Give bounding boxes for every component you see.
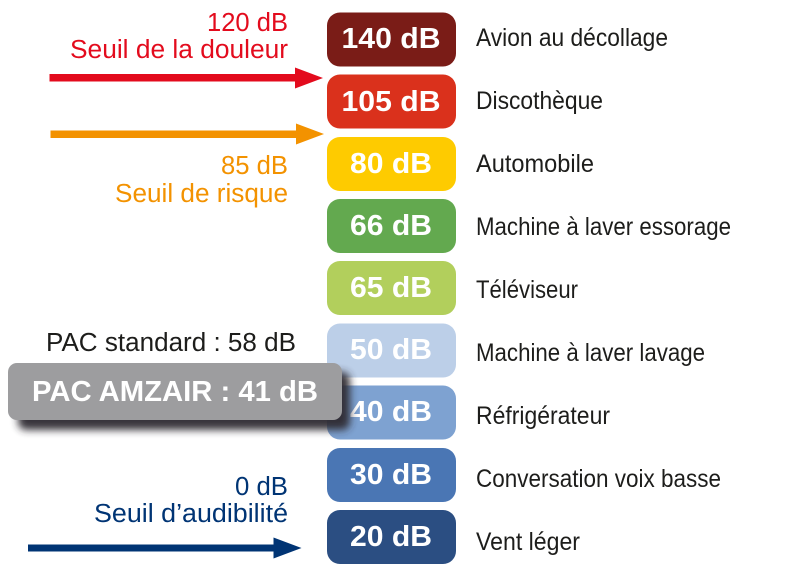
sound source labels — [476, 24, 731, 556]
sound source labels: Machine à laver essorage — [476, 213, 731, 241]
level: 66 dB: 66 dB — [350, 210, 432, 242]
sound source labels: Téléviseur — [476, 276, 578, 304]
level: 30 dB: 30 dB — [350, 459, 432, 491]
sound source labels: Vent léger — [476, 528, 580, 556]
level: 30 dB — [327, 448, 456, 502]
sound source labels: Automobile — [476, 150, 594, 178]
hearing threshold label: 0 dB — [235, 473, 288, 501]
level: 66 dB — [327, 199, 456, 253]
level: 105 dB: 105 dB — [342, 86, 440, 118]
arrow: risk threshold — [50, 124, 324, 144]
arrow: pain threshold — [50, 68, 323, 88]
level: 20 dB: 20 dB — [350, 521, 432, 553]
hearing threshold label — [94, 473, 288, 528]
level: 20 dB — [327, 510, 456, 564]
sound source labels: Discothèque — [476, 87, 603, 115]
standard heat pump label: PAC standard : 58 dB — [46, 329, 296, 357]
level: 40 dB — [327, 386, 456, 440]
risk threshold label: 85 dB — [221, 152, 288, 180]
level: 50 dB — [327, 324, 456, 378]
level: 50 dB: 50 dB — [350, 334, 432, 366]
sound source labels: Avion au décollage — [476, 24, 668, 52]
pain threshold label — [70, 9, 289, 64]
level: 140 dB: 140 dB — [342, 23, 440, 55]
level: 105 dB — [327, 74, 456, 128]
level: 65 dB: 65 dB — [350, 272, 432, 304]
pain threshold label: 120 dB — [207, 9, 288, 37]
decibel scale — [327, 12, 456, 564]
risk threshold label — [115, 152, 288, 208]
sound source labels: Réfrigérateur — [476, 402, 610, 430]
level: 65 dB — [327, 261, 456, 315]
level: 40 dB: 40 dB — [350, 396, 432, 428]
level: 80 dB — [327, 137, 456, 191]
level: 140 dB — [327, 12, 456, 66]
hearing threshold label: Seuil d’audibilité — [94, 500, 288, 528]
pain threshold label: Seuil de la douleur — [70, 36, 289, 64]
arrow: hearing threshold — [28, 538, 302, 558]
sound source labels: Conversation voix basse — [476, 465, 721, 493]
sound source labels: Machine à laver lavage — [476, 339, 705, 367]
risk threshold label: Seuil de risque — [115, 180, 288, 208]
level: 80 dB: 80 dB — [350, 148, 432, 180]
AMZAIR callout: PAC AMZAIR : 41 dB — [32, 376, 318, 408]
AMZAIR callout — [8, 363, 350, 430]
